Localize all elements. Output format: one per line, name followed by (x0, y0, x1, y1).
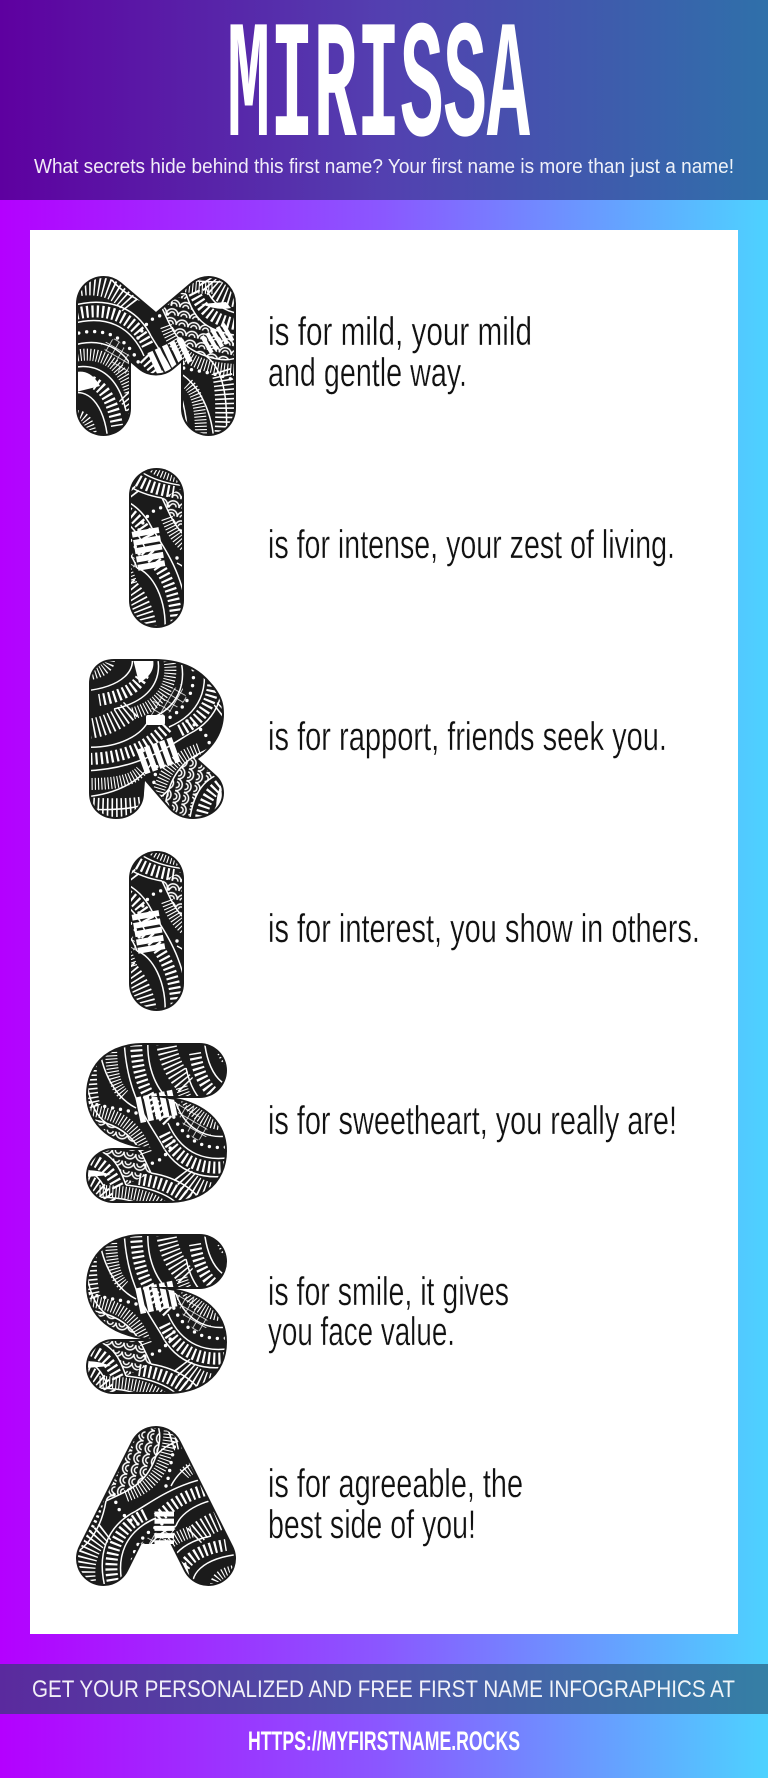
text: A: is for agreeable, the (268, 1462, 523, 1506)
text: S (268, 1270, 509, 1354)
icon: letter R (89, 659, 224, 819)
header band (0, 0, 768, 200)
icon: letter I (129, 468, 184, 628)
icon: letter S (86, 1234, 227, 1394)
text: S: you face value. (268, 1310, 455, 1354)
footer url: HTTPS://MYFIRSTNAME.ROCKS (248, 1726, 520, 1756)
icon: letter S (86, 1043, 227, 1203)
text: A: best side of you! (268, 1503, 476, 1547)
icon: letter I (129, 851, 184, 1011)
text: S: is for smile, it gives (268, 1270, 509, 1314)
panel: letters (30, 230, 738, 1634)
text: A (268, 1462, 523, 1547)
text: M: and gentle way. (268, 351, 467, 395)
icon: letter M (76, 276, 236, 436)
text: M (268, 310, 532, 395)
subtitle: What secrets hide behind this first name? Your first name is more than just a name! (34, 155, 734, 178)
footer band (0, 1664, 768, 1714)
text: M: is for mild, your mild (268, 310, 532, 354)
icon: letter A (76, 1426, 236, 1586)
